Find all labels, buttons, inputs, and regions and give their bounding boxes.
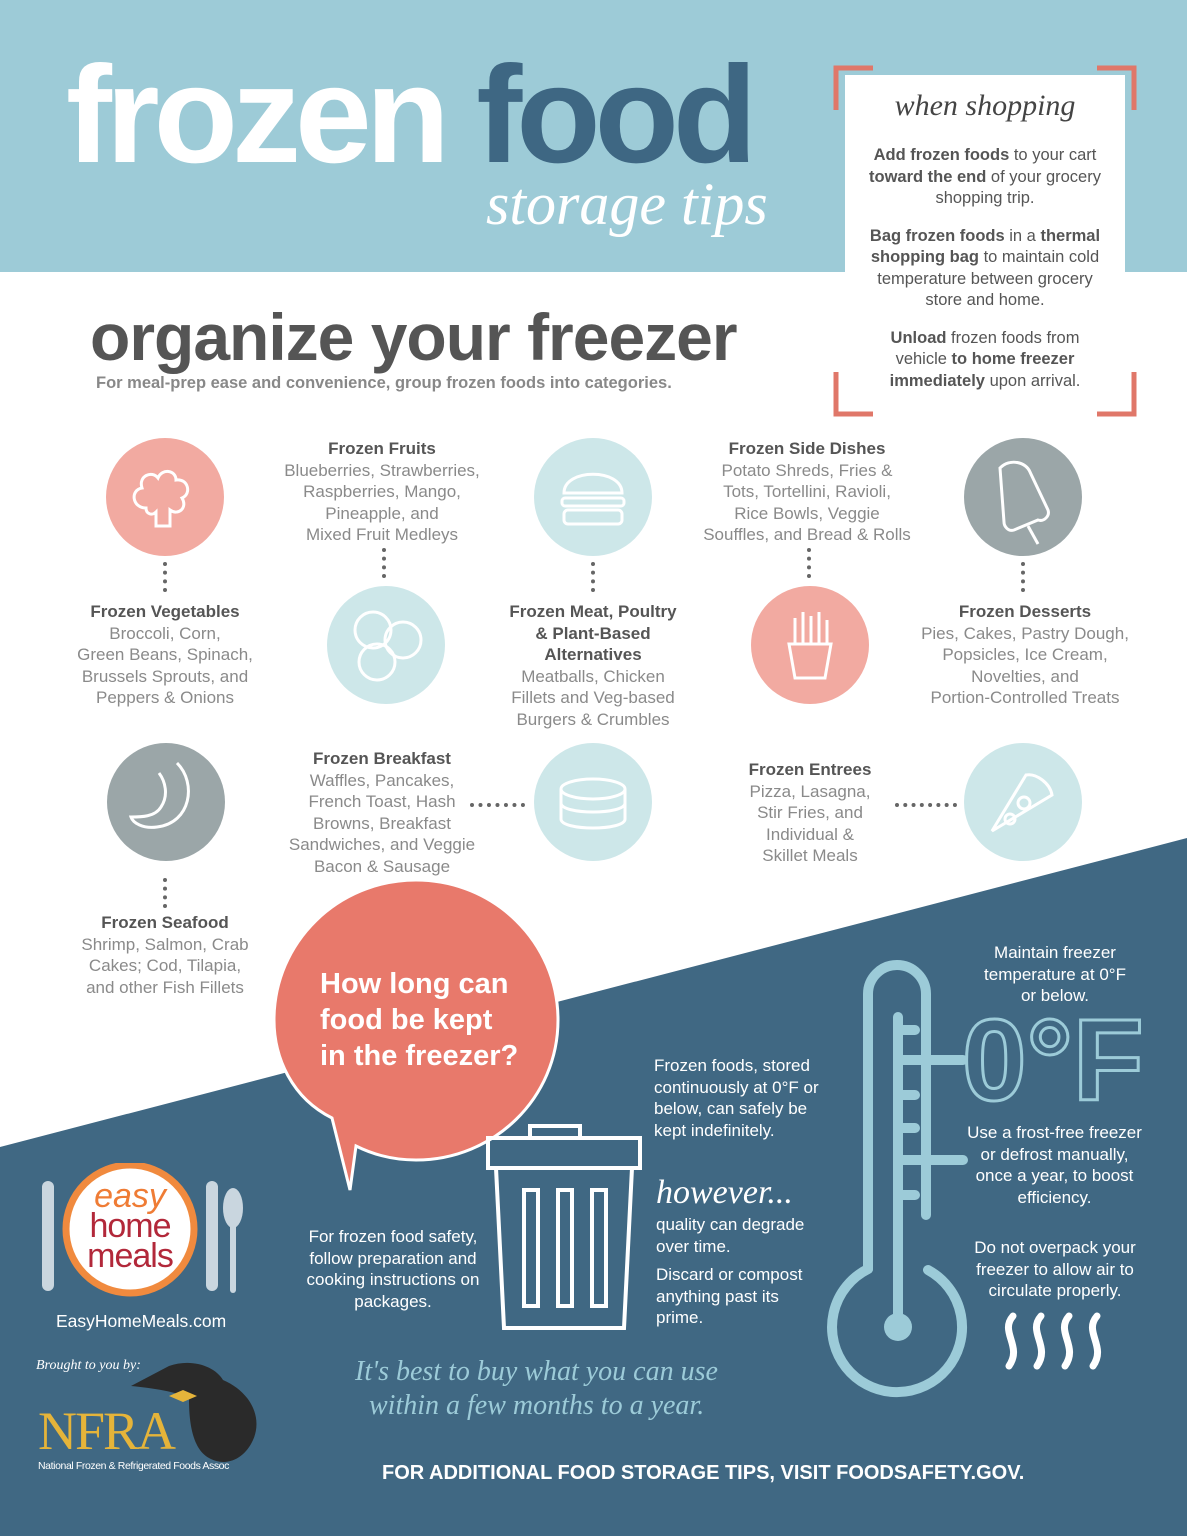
when shopping box: Add frozen foods to your cart toward the end of your grocery shopping trip. [869, 146, 1101, 207]
text: frozen meat: Meatballs, Chicken [521, 666, 665, 686]
heading: organize your freezer: For meal-prep ease and convenience, group frozen foods into categories. [96, 374, 672, 392]
speech bubble: How long can [320, 968, 508, 1000]
text: frost-free: Use a frost-free freezer or defrost manually, once a year, to boost efficiency. [967, 1123, 1142, 1206]
text: food safety: For frozen food safety, follow preparation and cooking instructions on packages. [307, 1227, 479, 1310]
text: frozen fruits: Pineapple, and [325, 504, 439, 522]
header band [0, 0, 1187, 272]
icon: popsicle [964, 438, 1082, 556]
icon: shrimp [107, 743, 225, 861]
logo: easy home meals: EasyHomeMeals.com [56, 1311, 226, 1331]
text: frozen meat: Fillets and Veg-based [511, 688, 675, 707]
text: frozen meat: Alternatives [544, 645, 642, 664]
text: 0°F: 0°F [962, 995, 1144, 1125]
when shopping box: Bag frozen foods in a thermal shopping bag to maintain cold temperature between grocery store and home. [870, 226, 1100, 309]
logo: easy home meals: home [89, 1207, 171, 1245]
icon: air waves [1004, 1312, 1102, 1370]
text: seafood: Shrimp, Salmon, Crab [81, 934, 249, 954]
text: desserts: Frozen Desserts [959, 602, 1091, 621]
text: breakfast: Bacon & Sausage [314, 856, 450, 876]
text: frozen fruits [284, 439, 480, 544]
speech bubble [276, 882, 560, 1190]
text: side dishes: Potato Shreds, Fries & [721, 460, 893, 480]
logo: NFRA [36, 1358, 256, 1472]
text: side dishes: Rice Bowls, Veggie [734, 504, 880, 522]
text: frozen vegetables: Green Beans, Spinach, [77, 645, 253, 664]
logo: easy home meals: easy [94, 1177, 166, 1215]
logo: NFRA: NFRA [38, 1401, 174, 1461]
text: desserts [921, 602, 1129, 707]
text: however: however... [656, 1174, 793, 1211]
text: frozen fruits: Blueberries, Strawberries, [284, 460, 480, 480]
icon: pancakes [534, 743, 652, 861]
text: entrees: Frozen Entrees [749, 760, 871, 779]
text: breakfast: Browns, Breakfast [313, 814, 451, 832]
text: overpack: Do not overpack your freezer to allow air to circulate properly. [974, 1238, 1136, 1300]
icon: thermometer [827, 960, 968, 1398]
text: however: Discard or compost anything past its prime. [656, 1265, 802, 1327]
title: frozen food [66, 38, 751, 192]
logo: easy home meals: meals [87, 1237, 173, 1275]
text: frozen meat: Burgers & Crumbles [516, 710, 670, 728]
text: stored continuously: Frozen foods, stored continuously at 0°F or below, can safely be kept indefinitely. [654, 1056, 819, 1140]
speech bubble: food be kept [320, 1004, 492, 1036]
when shopping box [834, 66, 1136, 416]
text: breakfast: French Toast, Hash [308, 792, 456, 811]
text: maintain: Maintain freezer temperature at 0°F or below. [984, 943, 1126, 1005]
text: frozen fruits: Mixed Fruit Medleys [306, 525, 458, 544]
text: frozen vegetables: Peppers & Onions [96, 688, 234, 707]
text: side dishes: Frozen Side Dishes [729, 439, 885, 458]
title: storage tips [486, 171, 768, 237]
text: however: quality can degrade over time. [656, 1215, 804, 1256]
speech bubble: in the freezer? [320, 1040, 518, 1072]
text: frozen vegetables: Brussels Sprouts, and [82, 666, 248, 686]
when shopping box: Unload frozen foods from vehicle to home freezer immediately upon arrival. [890, 328, 1080, 390]
script tagline [354, 1356, 718, 1421]
text: frozen fruits: Raspberries, Mango, [303, 482, 461, 501]
text: breakfast [289, 749, 475, 876]
heading: organize your freezer: organize your freezer [90, 300, 737, 374]
icon: pizza [964, 743, 1082, 861]
text: side dishes: Tots, Tortellini, Ravioli, [723, 482, 891, 501]
script tagline: within a few months to a year. [369, 1390, 704, 1421]
icon: vegetables [106, 438, 224, 556]
text: seafood: Cakes; Cod, Tilapia, [89, 956, 241, 975]
text: frozen meat [509, 602, 677, 728]
text: desserts: Pies, Cakes, Pastry Dough, [921, 624, 1129, 642]
icon: blueberries [327, 586, 445, 704]
text: frozen meat: Frozen Meat, Poultry [509, 602, 677, 621]
text: entrees: Individual & [766, 824, 854, 844]
text: breakfast: Frozen Breakfast [313, 749, 451, 768]
text: breakfast: Waffles, Pancakes, [310, 770, 454, 790]
connector dots [163, 562, 167, 592]
text: frozen fruits: Frozen Fruits [328, 439, 436, 458]
icon: trash can [486, 1124, 642, 1330]
text: entrees: Skillet Meals [762, 846, 858, 865]
text: seafood: Frozen Seafood [101, 913, 229, 932]
icon: burger [534, 438, 652, 556]
text: frozen vegetables: Frozen Vegetables [90, 602, 240, 621]
text: frozen meat: & Plant-Based [535, 624, 651, 642]
logo: NFRA: Brought to you by: [36, 1358, 141, 1373]
text: entrees: Stir Fries, and [757, 803, 863, 822]
text: seafood: and other Fish Fillets [86, 978, 244, 996]
script tagline: It's best to buy what you can use [355, 1356, 718, 1387]
text: entrees: Pizza, Lasagna, [750, 782, 870, 800]
text: desserts: Portion-Controlled Treats [930, 688, 1119, 707]
text: frozen vegetables [77, 602, 253, 707]
footer text: FOR ADDITIONAL FOOD STORAGE TIPS, VISIT FOODSAFETY.GOV. [382, 1462, 1024, 1484]
icon: fries [751, 586, 869, 704]
text: breakfast: Sandwiches, and Veggie [289, 835, 475, 854]
text: desserts: Popsicles, Ice Cream, [942, 645, 1108, 664]
when shopping box: when shopping [895, 89, 1075, 122]
logo: NFRA: National Frozen & Refrigerated Foods Assoc [38, 1460, 229, 1472]
text: entrees [749, 760, 871, 865]
logo: easy home meals [42, 1163, 243, 1331]
text: frozen vegetables: Broccoli, Corn, [109, 624, 221, 642]
text: side dishes: Souffles, and Bread & Rolls [703, 525, 911, 544]
text: however [656, 1174, 804, 1327]
text: seafood [81, 913, 249, 996]
text: desserts: Novelties, and [971, 666, 1079, 686]
text: side dishes [703, 439, 911, 544]
